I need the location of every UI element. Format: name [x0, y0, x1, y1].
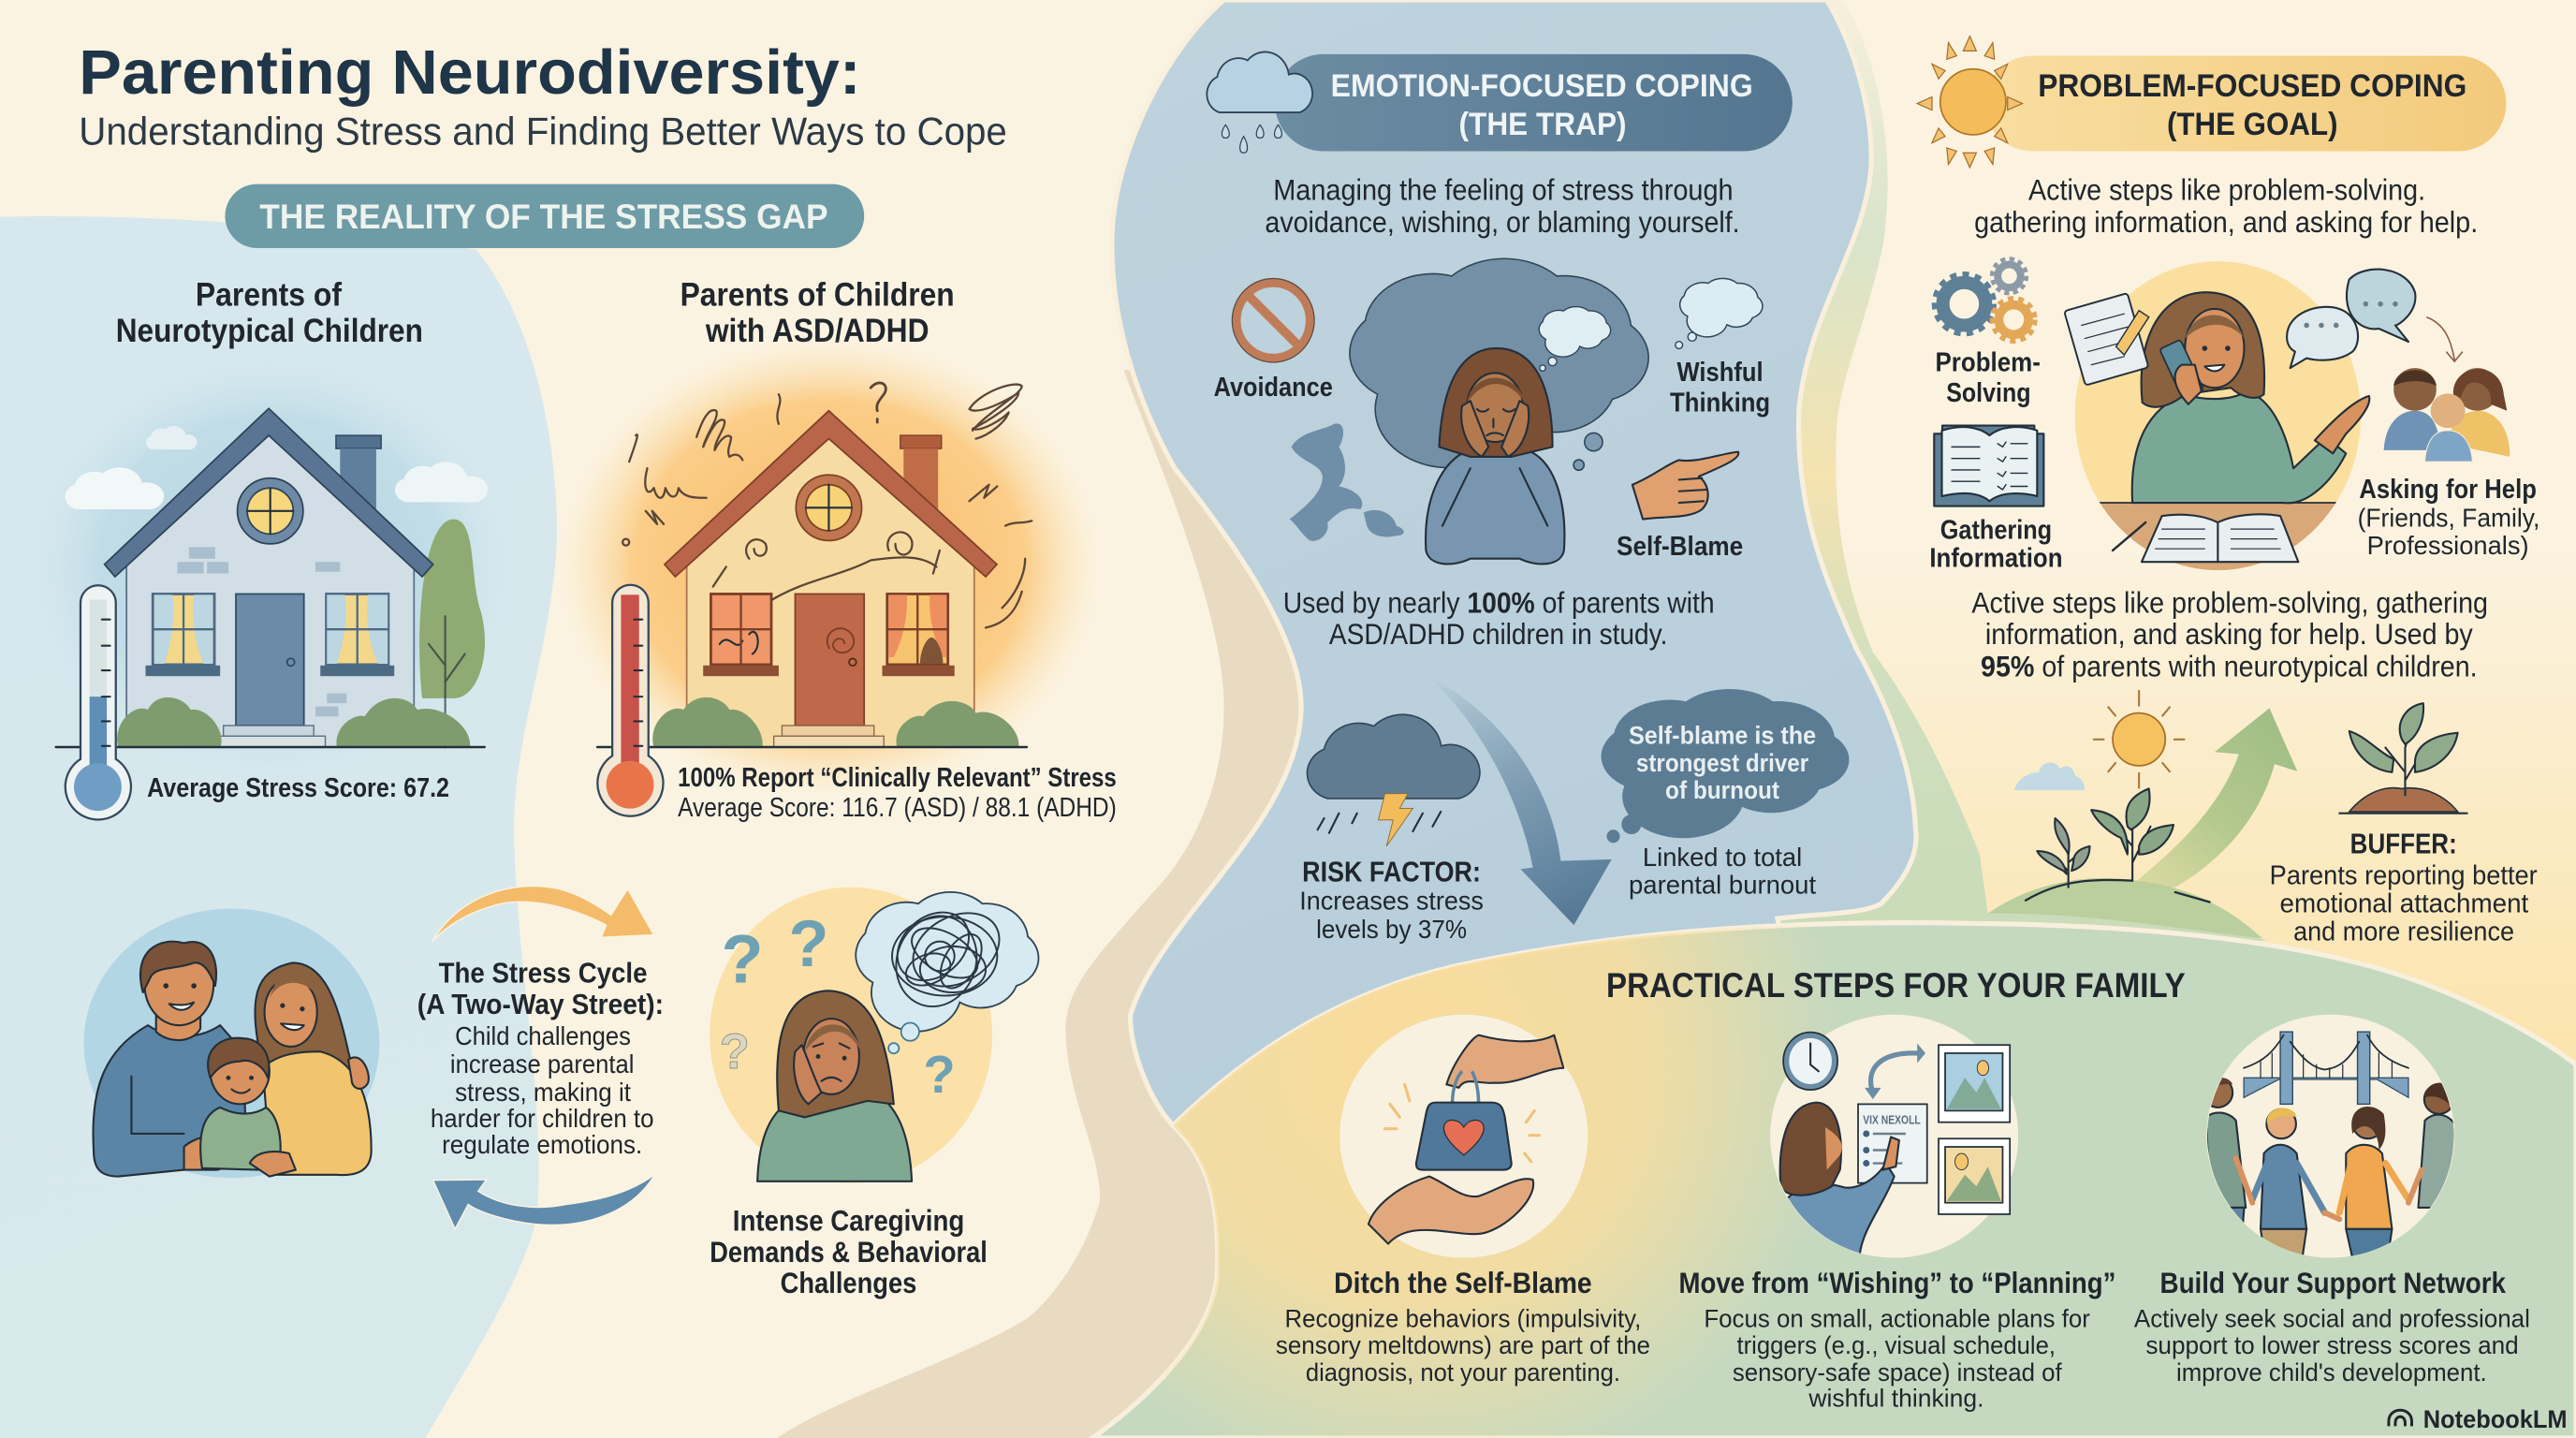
text: buffer: emotional attachment — [2280, 889, 2528, 919]
question marks: ? — [788, 906, 828, 980]
step 1 text: sensory meltdowns) are part of the — [1276, 1330, 1650, 1359]
step 1 text: Ditch the Self-Blame — [1334, 1266, 1592, 1299]
sun — [2093, 690, 2185, 788]
stress scribbles — [622, 383, 1032, 627]
step 2 illustration: planning — [1770, 1015, 2018, 1265]
intro text: avoidance, wishing, or blaming yourself. — [1265, 205, 1740, 239]
arrow: orange cycle arrow — [432, 887, 654, 942]
question marks: ? — [720, 1024, 750, 1079]
background: practical panel yellow wash — [1092, 923, 1975, 1438]
heading: ASD/ADHD parents: Parents of Children — [681, 276, 955, 313]
text: the stress cycle: regulate emotions. — [442, 1130, 642, 1159]
schedule: VIX NEXOLL — [1863, 1112, 1921, 1126]
icon: shadow blob — [1290, 423, 1404, 541]
icon: support group — [2384, 368, 2510, 462]
heading: neurotypical parents: Parents of — [196, 276, 342, 313]
text: linked to burnout — [1629, 843, 1816, 900]
window right — [320, 594, 394, 676]
callout: self-blame driver — [1602, 689, 1849, 843]
child — [200, 1038, 296, 1177]
header pill — [1275, 54, 1793, 151]
step 3 text: Actively seek social and professional — [2134, 1304, 2530, 1333]
label: gathering information: Gathering — [1940, 516, 2052, 546]
text: risk factor: Increases stress — [1299, 886, 1484, 915]
illustration: calm house — [24, 353, 518, 781]
schedule — [1858, 1104, 1927, 1183]
question marks: ? — [721, 920, 764, 998]
background: green yellow strip — [1643, 0, 2267, 1019]
intro text: Active steps like problem-solving. — [2028, 172, 2425, 206]
icon: notepad and pencil — [2064, 293, 2149, 386]
label: avoidance: Avoidance — [1214, 373, 1333, 403]
icon: gears — [1935, 258, 2035, 341]
stat: used by 95% — [1971, 586, 2488, 683]
thermometer: high stress — [597, 585, 664, 816]
clock — [1783, 1033, 1837, 1090]
father — [93, 942, 246, 1177]
label: asking for help: (Friends, Family, — [2358, 503, 2539, 532]
icon: sun — [1917, 37, 2023, 168]
cloud — [2014, 763, 2085, 790]
stat: used by 95%: Active steps like problem-solving, gathering — [1971, 586, 2488, 620]
header pill: EMOTION-FOCUSED COPING — [1331, 68, 1753, 104]
label: asking for help — [2358, 475, 2539, 560]
heading: neurotypical parents: Neurotypical Children — [116, 313, 423, 349]
stat: clinically relevant stress: Average Score: 116.7 (ASD) / 88.1 (ADHD) — [678, 793, 1117, 823]
text: the stress cycle: increase parental — [450, 1049, 634, 1078]
mother — [255, 962, 372, 1175]
illustration: parent under dark cloud — [1350, 258, 1648, 564]
label: gathering information — [1929, 516, 2063, 573]
stat: clinically relevant stress — [678, 763, 1117, 823]
stat: used by nearly 100% — [1283, 586, 1715, 651]
label: problem solving: Problem- — [1936, 348, 2041, 378]
label: wishful thinking — [1670, 358, 1770, 418]
wish bubble — [1539, 307, 1611, 371]
stat: used by 95%: information, and asking for help. Used by — [1985, 617, 2473, 651]
illustration: parent on the phone — [2073, 261, 2369, 577]
panel: the reality of the stress gap — [24, 184, 1117, 1299]
people — [2207, 1078, 2454, 1256]
intro text — [1974, 172, 2478, 239]
heading: ASD/ADHD parents — [681, 276, 955, 349]
step 2 text: sensory-safe space) instead of — [1733, 1357, 2062, 1387]
step 3 text: support to lower stress scores and — [2145, 1330, 2519, 1359]
callout: self-blame driver: strongest driver — [1636, 748, 1809, 777]
stat: used by nearly 100%: Used by nearly 100% of parents with — [1283, 586, 1715, 620]
label: wishful thinking: Thinking — [1670, 389, 1770, 418]
text: the stress cycle: stress, making it — [455, 1078, 631, 1107]
NotebookLM logo: NotebookLM — [2423, 1404, 2568, 1433]
panel: practical steps — [1276, 966, 2530, 1412]
text: linked to burnout: Linked to total — [1643, 843, 1802, 872]
question marks — [720, 906, 956, 1104]
background: practical panel green — [1092, 923, 2576, 1438]
label: intense caregiving demands: Intense Caregiving — [733, 1204, 964, 1238]
window left — [703, 594, 779, 676]
panel: emotion-focused coping — [1207, 51, 1849, 944]
step 1 text: diagnosis, not your parenting. — [1306, 1357, 1620, 1387]
heading: PRACTICAL STEPS FOR YOUR FAMILY — [1606, 966, 2186, 1005]
label: asking for help: Asking for Help — [2359, 475, 2537, 505]
photo bottom — [1939, 1138, 2010, 1214]
icon: pointing hand — [1632, 452, 1738, 520]
background: right warm wash — [1791, 0, 2576, 1438]
illustration: overwhelmed parent — [710, 888, 1038, 1183]
text: risk factor — [1299, 856, 1484, 944]
text: the stress cycle: harder for children to — [431, 1104, 654, 1133]
step 3 text: Build Your Support Network — [2160, 1266, 2506, 1299]
icon: rain cloud — [1207, 51, 1312, 153]
window right — [882, 594, 955, 676]
label: intense caregiving demands — [710, 1204, 988, 1299]
arrow: blue cycle arrow — [433, 1174, 655, 1229]
header pill — [1984, 56, 2506, 151]
tangled thoughts — [884, 898, 1013, 1018]
text: buffer: Parents reporting better — [2270, 861, 2538, 891]
hill — [1988, 878, 2262, 938]
panel: central blue background — [1112, 0, 1916, 1125]
text: the stress cycle: The Stress Cycle — [439, 957, 648, 990]
text: the stress cycle: (A Two-Way Street): — [417, 988, 664, 1020]
text: buffer: and more resilience — [2293, 917, 2514, 946]
text: buffer: BUFFER: — [2350, 828, 2457, 860]
icon: storm cloud — [1307, 714, 1480, 846]
illustration: happy family — [84, 909, 379, 1178]
notebook — [2142, 514, 2298, 562]
label: intense caregiving demands: Challenges — [781, 1266, 916, 1299]
question marks: ? — [923, 1045, 956, 1104]
arrow — [1871, 1053, 1919, 1093]
seedlings — [2026, 788, 2210, 902]
stat: average stress score: Average Stress Score: 67.2 — [147, 773, 449, 803]
stat: clinically relevant stress: 100% Report “Clinically Relevant” Stress — [678, 763, 1117, 793]
stat: used by 95%: 95% of parents with neurotypical children. — [1981, 650, 2478, 683]
label: self-blame: Self-Blame — [1617, 532, 1743, 562]
title block — [79, 38, 1007, 153]
label: problem solving: Solving — [1946, 378, 2030, 408]
intro text: gathering information, and asking for help. — [1974, 205, 2478, 239]
heading: neurotypical parents — [116, 276, 423, 349]
label: intense caregiving demands: Demands & Behavioral — [710, 1235, 988, 1269]
step 3 text — [2134, 1266, 2530, 1387]
table — [2099, 502, 2336, 570]
text: buffer — [2270, 828, 2538, 946]
stat: used by nearly 100%: ASD/ADHD children in study. — [1329, 617, 1667, 651]
header pill: (THE TRAP) — [1459, 107, 1627, 142]
text: risk factor: levels by 37% — [1316, 915, 1467, 944]
label: asking for help: Professionals) — [2367, 531, 2529, 560]
section pill — [225, 184, 864, 248]
icon: sprout in soil — [2339, 703, 2467, 814]
text: the stress cycle: Child challenges — [455, 1021, 631, 1050]
panel: problem-focused coping — [1917, 37, 2539, 946]
callout: self-blame driver: of burnout — [1665, 775, 1779, 804]
step 1 text — [1276, 1266, 1650, 1387]
label: problem solving — [1936, 348, 2041, 408]
step 3 text: improve child's development. — [2176, 1357, 2487, 1387]
subtitle: Understanding Stress and Finding Better Ways to Cope — [79, 110, 1007, 153]
step 2 text: Move from “Wishing” to “Planning” — [1679, 1266, 2115, 1299]
step 1 illustration: ditch the self-blame — [1339, 1015, 1588, 1257]
step 1 text: Recognize behaviors (impulsivity, — [1284, 1304, 1641, 1333]
callout: self-blame driver: Self-blame is the — [1629, 720, 1816, 749]
text: linked to burnout: parental burnout — [1629, 871, 1816, 900]
title: Parenting Neurodiversity: — [79, 38, 861, 108]
step 2 text: wishful thinking. — [1808, 1383, 1983, 1412]
step 3 illustration: support network — [2203, 1015, 2461, 1273]
intro text: Managing the feeling of stress through — [1273, 173, 1734, 207]
arrow: downward burnout arrow — [1429, 677, 1612, 925]
text: risk factor: RISK FACTOR: — [1302, 856, 1481, 888]
header pill: PROBLEM-FOCUSED COPING — [2038, 68, 2466, 104]
background: beige wave — [777, 370, 1347, 1438]
icon: open book — [1934, 426, 2043, 506]
thermometer: low stress — [66, 585, 131, 820]
label: wishful thinking: Wishful — [1677, 358, 1764, 388]
section pill: THE REALITY OF THE STRESS GAP — [259, 198, 828, 236]
photo top — [1939, 1045, 2010, 1123]
heading: ASD/ADHD parents: with ASD/ADHD — [705, 313, 929, 349]
bridge — [2244, 1032, 2408, 1104]
illustration: growth scene — [1988, 690, 2297, 938]
step 2 text: Focus on small, actionable plans for — [1704, 1304, 2090, 1333]
illustration: stressed house — [559, 337, 1101, 797]
window left — [146, 594, 220, 676]
icon: wishful thinking cloud — [1676, 278, 1763, 348]
step 2 text — [1679, 1266, 2115, 1412]
intro text — [1265, 173, 1740, 239]
header pill: (THE GOAL) — [2167, 107, 2338, 142]
background: left blue wave — [0, 216, 557, 1438]
icon: speech bubbles — [2287, 270, 2463, 368]
step 2 text: triggers (e.g., visual schedule, — [1736, 1330, 2056, 1359]
planner parent — [1780, 1103, 1899, 1265]
icon: avoidance sign — [1232, 278, 1314, 362]
growth arrow — [2130, 708, 2297, 888]
text: the stress cycle — [417, 957, 664, 1159]
label: gathering information: Information — [1929, 543, 2063, 573]
